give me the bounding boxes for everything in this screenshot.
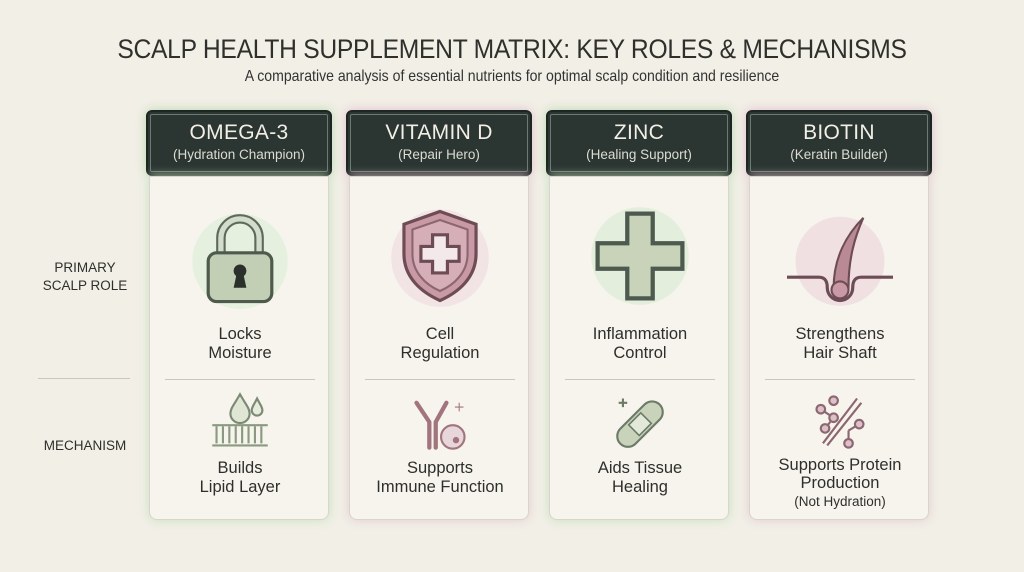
icon: shield	[391, 210, 488, 307]
header: vitamin d: (Repair Hero)	[398, 147, 480, 162]
text: aids tissue healing	[598, 459, 682, 496]
icon: padlock	[192, 214, 288, 309]
row label: mechanism: MECHANISM	[44, 438, 126, 453]
text: inflammation control	[593, 325, 687, 362]
text: cell regulation: Cell	[426, 325, 454, 343]
subtitle: A comparative analysis of essential nutrients for optimal scalp condition and resilience	[245, 68, 779, 85]
text: inflammation control: Control	[613, 344, 667, 362]
card: zinc	[549, 176, 729, 520]
column: zinc	[541, 105, 737, 524]
card: vitamin d	[349, 176, 529, 520]
text: strengthens hair shaft: Strengthens	[796, 325, 884, 343]
header: omega-3: (Hydration Champion)	[173, 147, 305, 162]
card: biotin	[749, 176, 929, 520]
header: biotin: (Keratin Builder)	[790, 147, 888, 162]
header: biotin: BIOTIN	[803, 121, 875, 144]
icon: hair follicle	[787, 216, 893, 306]
text: inflammation control: Inflammation	[593, 325, 687, 343]
header: vitamin d: VITAMIN D	[385, 121, 493, 144]
card: omega-3	[149, 176, 329, 520]
text: locks moisture: Locks	[218, 325, 262, 343]
icon: plus cross	[591, 207, 689, 305]
header: biotin	[746, 110, 932, 176]
column: vitamin d	[342, 106, 536, 524]
text: supports immune function	[376, 459, 504, 496]
icon: protein molecule	[816, 395, 864, 449]
icon: antibody and cell	[414, 400, 466, 450]
text: supports protein production: (Not Hydration)	[794, 494, 886, 509]
text: supports immune function: Supports	[407, 459, 473, 477]
text: locks moisture	[208, 325, 272, 362]
text: cell regulation: Regulation	[401, 344, 479, 362]
header: omega-3: OMEGA-3	[190, 121, 288, 144]
text: supports protein production: Supports Protein	[779, 456, 901, 474]
column: biotin	[742, 106, 936, 524]
icon: bandage	[616, 398, 664, 448]
text: strengthens hair shaft	[796, 325, 884, 362]
text: builds lipid layer: Lipid Layer	[200, 478, 280, 496]
text: builds lipid layer	[200, 459, 280, 496]
text: locks moisture: Moisture	[208, 344, 272, 362]
header: zinc	[546, 110, 732, 176]
header: zinc: (Healing Support)	[586, 147, 692, 162]
column: omega-3	[141, 105, 337, 524]
text: aids tissue healing: Aids Tissue	[598, 459, 682, 477]
row label: primary scalp role: PRIMARY	[54, 260, 116, 275]
title: SCALP HEALTH SUPPLEMENT MATRIX: KEY ROLES & MECHANISMS	[117, 34, 907, 64]
row label: primary scalp role	[43, 260, 127, 293]
text: strengthens hair shaft: Hair Shaft	[803, 344, 877, 362]
text: supports protein production: Production	[801, 474, 879, 492]
text: cell regulation	[401, 325, 479, 362]
icon: lipid layer	[212, 392, 268, 446]
text: supports immune function: Immune Function	[376, 478, 504, 496]
text: supports protein production	[779, 456, 901, 509]
row label: primary scalp role: SCALP ROLE	[43, 278, 127, 293]
text: aids tissue healing: Healing	[612, 478, 668, 496]
header: omega-3	[146, 110, 332, 176]
header: zinc: ZINC	[614, 121, 664, 144]
header: vitamin d	[346, 110, 532, 176]
text: builds lipid layer: Builds	[218, 459, 262, 477]
